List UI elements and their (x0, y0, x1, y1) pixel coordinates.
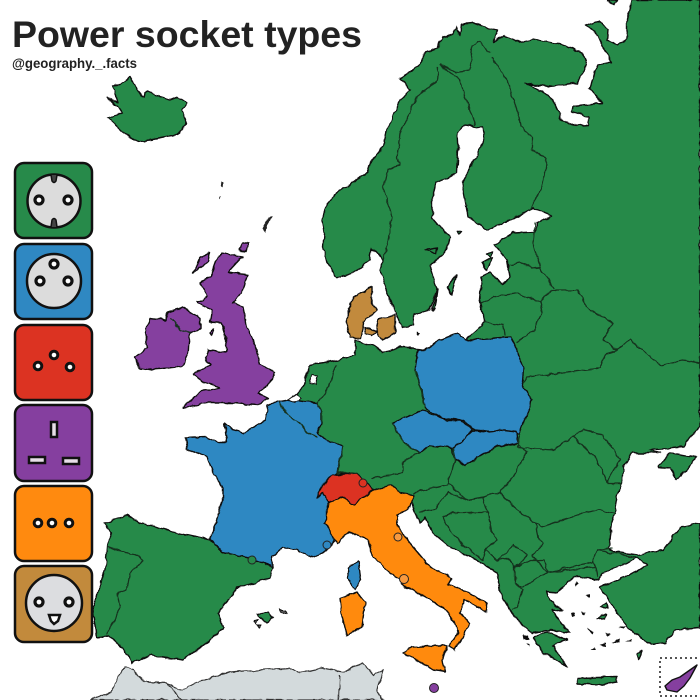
title: Power socket types (12, 14, 362, 55)
legend: purple socket type G (15, 405, 92, 481)
legend: green socket type F (15, 163, 92, 238)
Denmark (347, 287, 395, 340)
Sardinia (340, 592, 365, 636)
legend: orange socket type L (15, 486, 92, 561)
Shetland and Faroe islands (219, 181, 272, 233)
microstates (248, 479, 438, 692)
Slovakia (452, 430, 518, 465)
Mediterranean and Aegean islands (254, 582, 642, 685)
Baltic islands (418, 0, 618, 335)
credit handle: @geography._.facts (12, 55, 137, 71)
Netherlands inland water (288, 375, 318, 403)
legend: blue socket type E (15, 244, 92, 319)
inset: Cyprus (660, 658, 700, 696)
Scottish islands (193, 243, 249, 336)
Poland (415, 333, 532, 433)
North Africa landmass (90, 663, 383, 700)
Spain and Portugal (93, 515, 273, 663)
Sicily (402, 645, 448, 672)
Czechia (393, 410, 473, 453)
legend: red socket type J (15, 325, 92, 400)
France and Belgium border (280, 403, 317, 437)
Scandinavia, Russia and continental Europe (green countries) (292, 0, 700, 645)
Italy (325, 485, 487, 650)
Ireland (135, 307, 200, 370)
Switzerland (317, 473, 373, 505)
legend: brown socket type K (15, 566, 92, 642)
legend (15, 163, 92, 642)
United Kingdom (183, 253, 275, 408)
Iceland (107, 77, 187, 142)
France (185, 400, 343, 567)
national borders (317, 42, 700, 610)
Corsica (347, 560, 361, 589)
Crimea (658, 453, 697, 480)
